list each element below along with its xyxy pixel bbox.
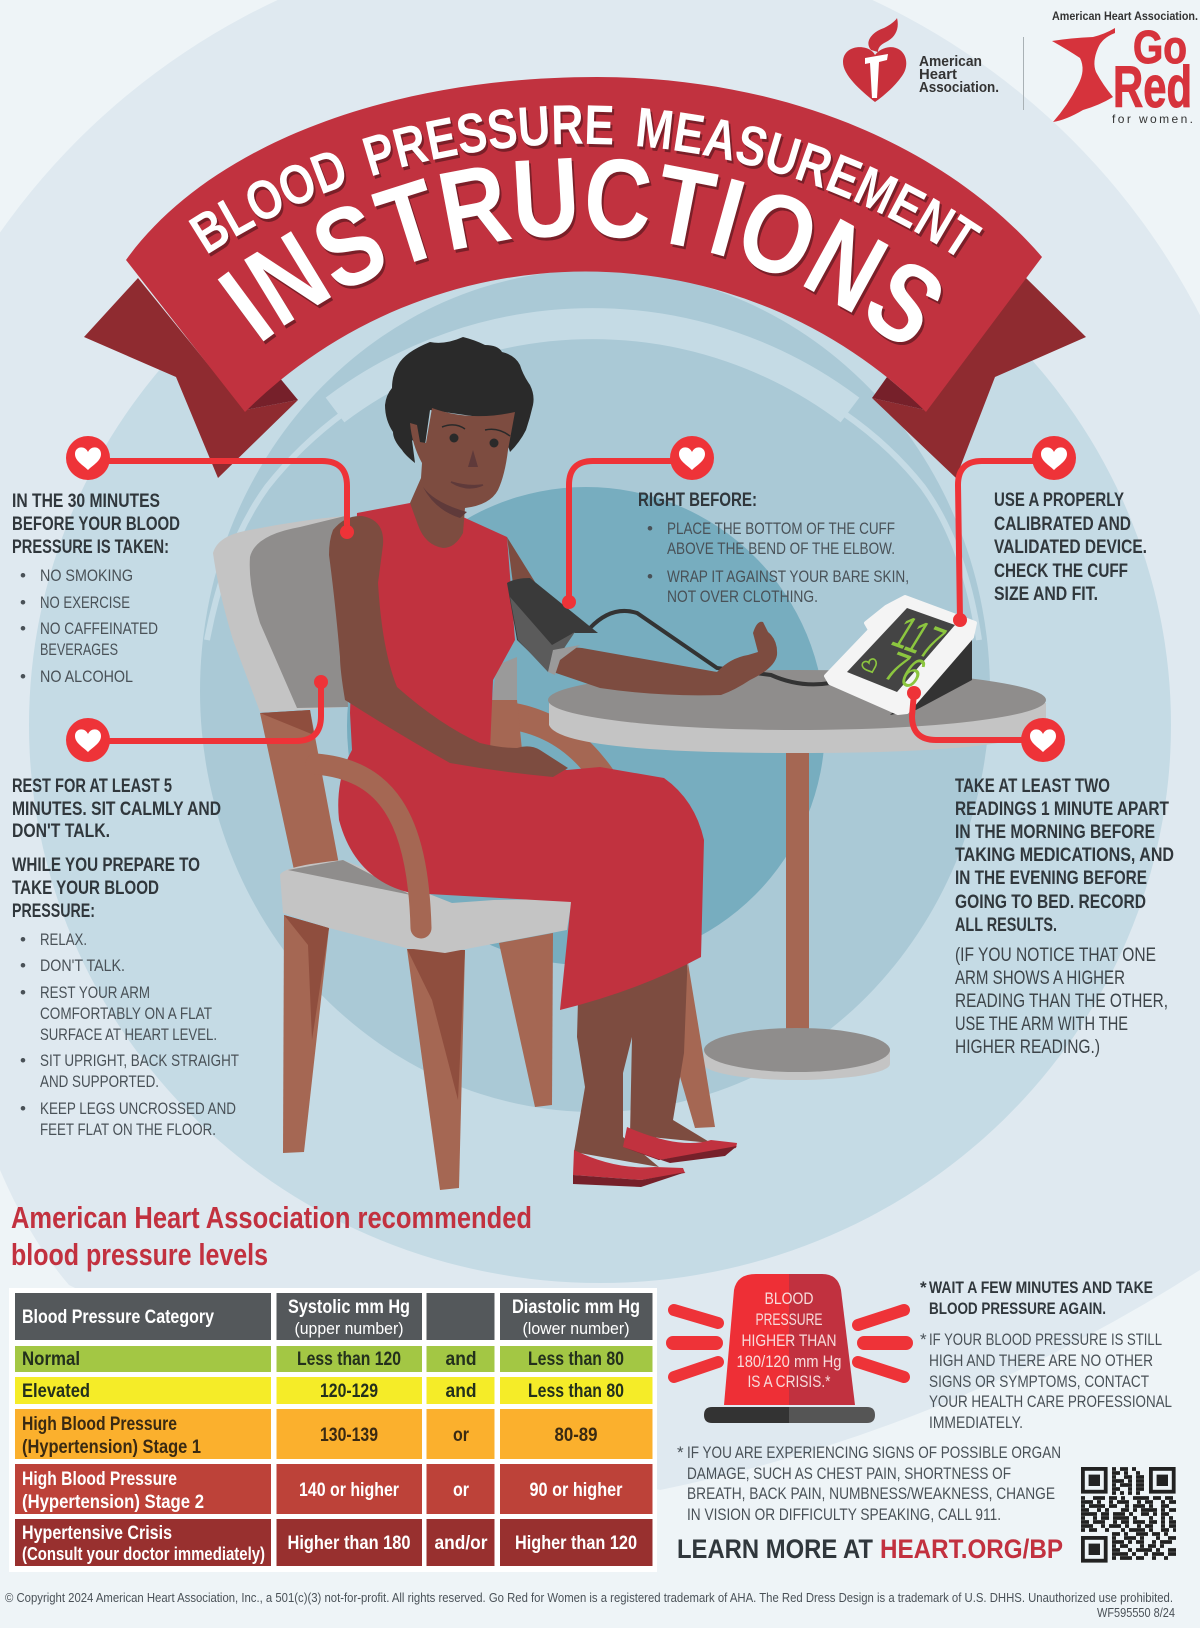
text: device: VALIDATED DEVICE. — [994, 537, 1147, 558]
text: 30 minutes before: NO CAFFEINATED — [40, 619, 158, 638]
row: elevated: Less than 80 — [528, 1381, 624, 1402]
text: rest and prepare: PRESSURE: — [12, 901, 95, 922]
text: wait and retake: IMMEDIATELY. — [929, 1413, 1023, 1432]
chair — [213, 516, 715, 1190]
text: 30 minutes before: PRESSURE IS TAKEN: — [12, 537, 169, 558]
text: wait and retake: WAIT A FEW MINUTES AND TAKE — [929, 1278, 1153, 1297]
upper far arm — [507, 537, 535, 600]
text: rest and prepare: REST FOR AT LEAST 5 — [12, 776, 172, 797]
logo: Go Red for Women: Go — [1133, 21, 1187, 73]
row: crisis — [15, 1519, 652, 1566]
text: rest and prepare: REST YOUR ARM — [40, 983, 150, 1002]
text: rest and prepare: • — [20, 930, 26, 949]
title: BLOOD PRESSURE MEASUREMENT — [188, 105, 985, 258]
row: normal — [15, 1346, 652, 1372]
chair backrest — [213, 516, 346, 712]
neck and face — [410, 408, 515, 548]
logo: American Heart Association: Association. — [919, 80, 999, 96]
text: organ damage warning — [677, 1443, 1061, 1524]
text: organ damage warning: IN VISION OR DIFFICULTY SPEAKING, CALL 911. — [687, 1505, 1001, 1524]
blood pressure monitor — [826, 597, 975, 715]
row: normal: Less than 80 — [528, 1349, 624, 1370]
icon: alarm siren — [673, 1274, 906, 1423]
blood pressure cuff tube — [590, 611, 830, 684]
icon: alarm siren: PRESSURE — [756, 1310, 822, 1329]
row: stage 1: 130-139 — [320, 1425, 378, 1446]
banner — [84, 77, 1086, 478]
row: crisis: Hypertensive Crisis — [22, 1523, 172, 1544]
header row: (lower number) — [522, 1319, 630, 1338]
text: 30 minutes before: • — [20, 566, 26, 585]
hair — [385, 337, 534, 463]
logo: Go Red for Women — [1052, 9, 1198, 126]
text: 30 minutes before: BEVERAGES — [40, 640, 118, 659]
text: device — [994, 490, 1147, 605]
text: rest and prepare: • — [20, 1051, 26, 1070]
text: 30 minutes before: NO ALCOHOL — [40, 667, 133, 686]
row: stage 2: or — [453, 1480, 470, 1501]
text: wait and retake: * — [920, 1278, 927, 1297]
row: stage 1: High Blood Pressure — [22, 1414, 177, 1435]
text: wait and retake: BLOOD PRESSURE AGAIN. — [929, 1299, 1106, 1318]
text: rest and prepare: COMFORTABLY ON A FLAT — [40, 1004, 212, 1023]
near armrest — [316, 764, 421, 928]
text: readings: ALL RESULTS. — [955, 915, 1057, 936]
row: normal: and — [446, 1349, 476, 1370]
text: rest and prepare: FEET FLAT ON THE FLOOR. — [40, 1120, 216, 1139]
text: wait and retake: SIGNS OR SYMPTOMS, CONTACT — [929, 1372, 1149, 1391]
row: stage 2: High Blood Pressure — [22, 1469, 177, 1490]
text: readings: TAKE AT LEAST TWO — [955, 776, 1110, 797]
table furniture — [704, 745, 890, 1080]
blood pressure monitor: 117 — [884, 606, 954, 668]
text: device: SIZE AND FIT. — [994, 584, 1098, 605]
text: organ damage warning: * — [677, 1443, 684, 1462]
footer: WF595550 8/24 — [1097, 1605, 1175, 1620]
forearm — [553, 622, 777, 695]
text: rest and prepare: DON'T TALK. — [40, 956, 125, 975]
callout line dots — [314, 525, 967, 700]
text: 30 minutes before: • — [20, 619, 26, 638]
row: stage 1: (Hypertension) Stage 1 — [22, 1437, 201, 1458]
header row: Blood Pressure Category — [22, 1307, 214, 1328]
text: 30 minutes before: • — [20, 667, 26, 686]
text: wait and retake: * — [920, 1330, 927, 1349]
text: 30 minutes before: NO EXERCISE — [40, 593, 130, 612]
table: blood pressure categories — [9, 1288, 657, 1572]
row: elevated: Elevated — [22, 1381, 90, 1402]
text: right before: • — [647, 567, 653, 586]
text: right before: RIGHT BEFORE: — [638, 490, 757, 511]
blood pressure cuff — [507, 578, 598, 672]
logo: American Heart Association: Heart — [919, 67, 957, 83]
text: device: USE A PROPERLY — [994, 490, 1124, 511]
icon: alarm siren: 180/120 mm Hg — [736, 1352, 842, 1371]
text: organ damage warning: DAMAGE, SUCH AS CHEST PAIN, SHORTNESS OF — [687, 1464, 1011, 1483]
callout lines — [88, 461, 1054, 741]
text: 30 minutes before: NO SMOKING — [40, 566, 133, 585]
chair seat — [280, 860, 571, 953]
text: rest and prepare: KEEP LEGS UNCROSSED AND — [40, 1099, 236, 1118]
row: crisis: and/or — [434, 1533, 488, 1554]
text: 30 minutes before: IN THE 30 MINUTES — [12, 491, 160, 512]
text: wait and retake — [920, 1278, 1172, 1432]
text: rest and prepare: TAKE YOUR BLOOD — [12, 878, 159, 899]
icon: heart markers — [66, 436, 1076, 762]
text: right before: PLACE THE BOTTOM OF THE CUFF — [667, 519, 895, 538]
banner right tail — [872, 277, 1086, 478]
footer — [5, 1590, 1175, 1620]
row: stage 2: 140 or higher — [299, 1480, 399, 1501]
row: stage 2 — [15, 1464, 652, 1514]
text: rest and prepare: WHILE YOU PREPARE TO — [12, 855, 200, 876]
text: rest and prepare: AND SUPPORTED. — [40, 1072, 159, 1091]
header row: Diastolic mm Hg — [512, 1297, 640, 1318]
legs — [574, 950, 711, 1167]
row: stage 2: (Hypertension) Stage 2 — [22, 1492, 204, 1513]
text: readings: HIGHER READING.) — [955, 1037, 1100, 1058]
QR code — [1081, 1469, 1176, 1561]
dress — [338, 503, 704, 1010]
logo: American Heart Association — [843, 18, 999, 102]
near arm — [329, 516, 568, 777]
text: rest and prepare: • — [20, 983, 26, 1002]
text: rest and prepare: SIT UPRIGHT, BACK STRAIGHT — [40, 1051, 239, 1070]
text: wait and retake: HIGH AND THERE ARE NO OTHER — [929, 1351, 1153, 1370]
text: learn more: HEART.ORG/BP — [880, 1534, 1063, 1564]
text: readings: (IF YOU NOTICE THAT ONE — [955, 945, 1156, 966]
text: organ damage warning: IF YOU ARE EXPERIENCING SIGNS OF POSSIBLE ORGAN — [687, 1443, 1061, 1462]
chair frame — [260, 710, 340, 870]
text: device: CALIBRATED AND — [994, 514, 1131, 535]
blood pressure monitor: 76 — [876, 643, 934, 697]
text: rest and prepare: MINUTES. SIT CALMLY AND — [12, 799, 221, 820]
text: readings: ARM SHOWS A HIGHER — [955, 968, 1125, 989]
row: stage 1: 80-89 — [554, 1425, 598, 1446]
text: learn more: LEARN MORE AT — [677, 1534, 873, 1564]
text: readings: IN THE EVENING BEFORE — [955, 868, 1147, 889]
chair back legs — [676, 963, 715, 1128]
text: readings: USE THE ARM WITH THE — [955, 1014, 1128, 1035]
row: crisis: (Consult your doctor immediately) — [22, 1544, 265, 1564]
row: stage 2: 90 or higher — [530, 1480, 623, 1501]
text: rest and prepare — [12, 776, 239, 1139]
text: device: CHECK THE CUFF — [994, 561, 1128, 582]
text: right before: WRAP IT AGAINST YOUR BARE SKIN, — [667, 567, 909, 586]
text: 30 minutes before: • — [20, 593, 26, 612]
table top — [548, 670, 1046, 753]
header row — [15, 1293, 652, 1340]
text: rest and prepare: RELAX. — [40, 930, 87, 949]
text: organ damage warning: BREATH, BACK PAIN, NUMBNESS/WEAKNESS, CHANGE — [687, 1484, 1055, 1503]
text: right before: NOT OVER CLOTHING. — [667, 587, 818, 606]
row: elevated: and — [446, 1381, 476, 1402]
header row: Systolic mm Hg — [288, 1297, 410, 1318]
text: rest and prepare: • — [20, 1099, 26, 1118]
logo: Go Red for Women: for women. — [1112, 112, 1193, 126]
text: 30 minutes before: BEFORE YOUR BLOOD — [12, 514, 180, 535]
text: right before: • — [647, 519, 653, 538]
row: crisis: Higher than 180 — [288, 1533, 410, 1554]
row: crisis: Higher than 120 — [515, 1533, 637, 1554]
row: stage 1 — [15, 1409, 652, 1459]
text: readings: IN THE MORNING BEFORE — [955, 822, 1155, 843]
heading: recommended levels: American Heart Association recommended — [11, 1200, 532, 1235]
text: rest and prepare: • — [20, 956, 26, 975]
text: right before: ABOVE THE BEND OF THE ELBOW. — [667, 539, 895, 558]
title: INSTRUCTIONS — [218, 158, 943, 345]
row: stage 1: or — [453, 1425, 470, 1446]
row: elevated: 120-129 — [320, 1381, 378, 1402]
row: elevated — [15, 1377, 652, 1404]
logo: American Heart Association: American — [919, 54, 982, 70]
heading: recommended levels: blood pressure levels — [11, 1237, 268, 1272]
text: readings: GOING TO BED. RECORD — [955, 892, 1146, 913]
shoes — [623, 1127, 737, 1160]
text: readings — [955, 776, 1174, 1058]
row: normal: Normal — [22, 1349, 80, 1370]
text: right before — [638, 490, 909, 606]
icon: alarm siren: IS A CRISIS.* — [748, 1372, 831, 1391]
text: rest and prepare: SURFACE AT HEART LEVEL. — [40, 1025, 217, 1044]
row: normal: Less than 120 — [297, 1349, 401, 1370]
header row: (upper number) — [294, 1319, 404, 1338]
woman — [316, 337, 830, 1187]
icon: alarm siren: HIGHER THAN — [742, 1331, 836, 1350]
banner left tail — [84, 278, 298, 478]
text: rest and prepare: DON'T TALK. — [12, 821, 110, 842]
text: 30 minutes before — [12, 491, 180, 686]
face details — [423, 425, 510, 518]
heading: recommended levels — [11, 1200, 532, 1272]
icon: alarm siren: BLOOD — [764, 1289, 814, 1308]
text: learn more — [677, 1534, 1063, 1564]
